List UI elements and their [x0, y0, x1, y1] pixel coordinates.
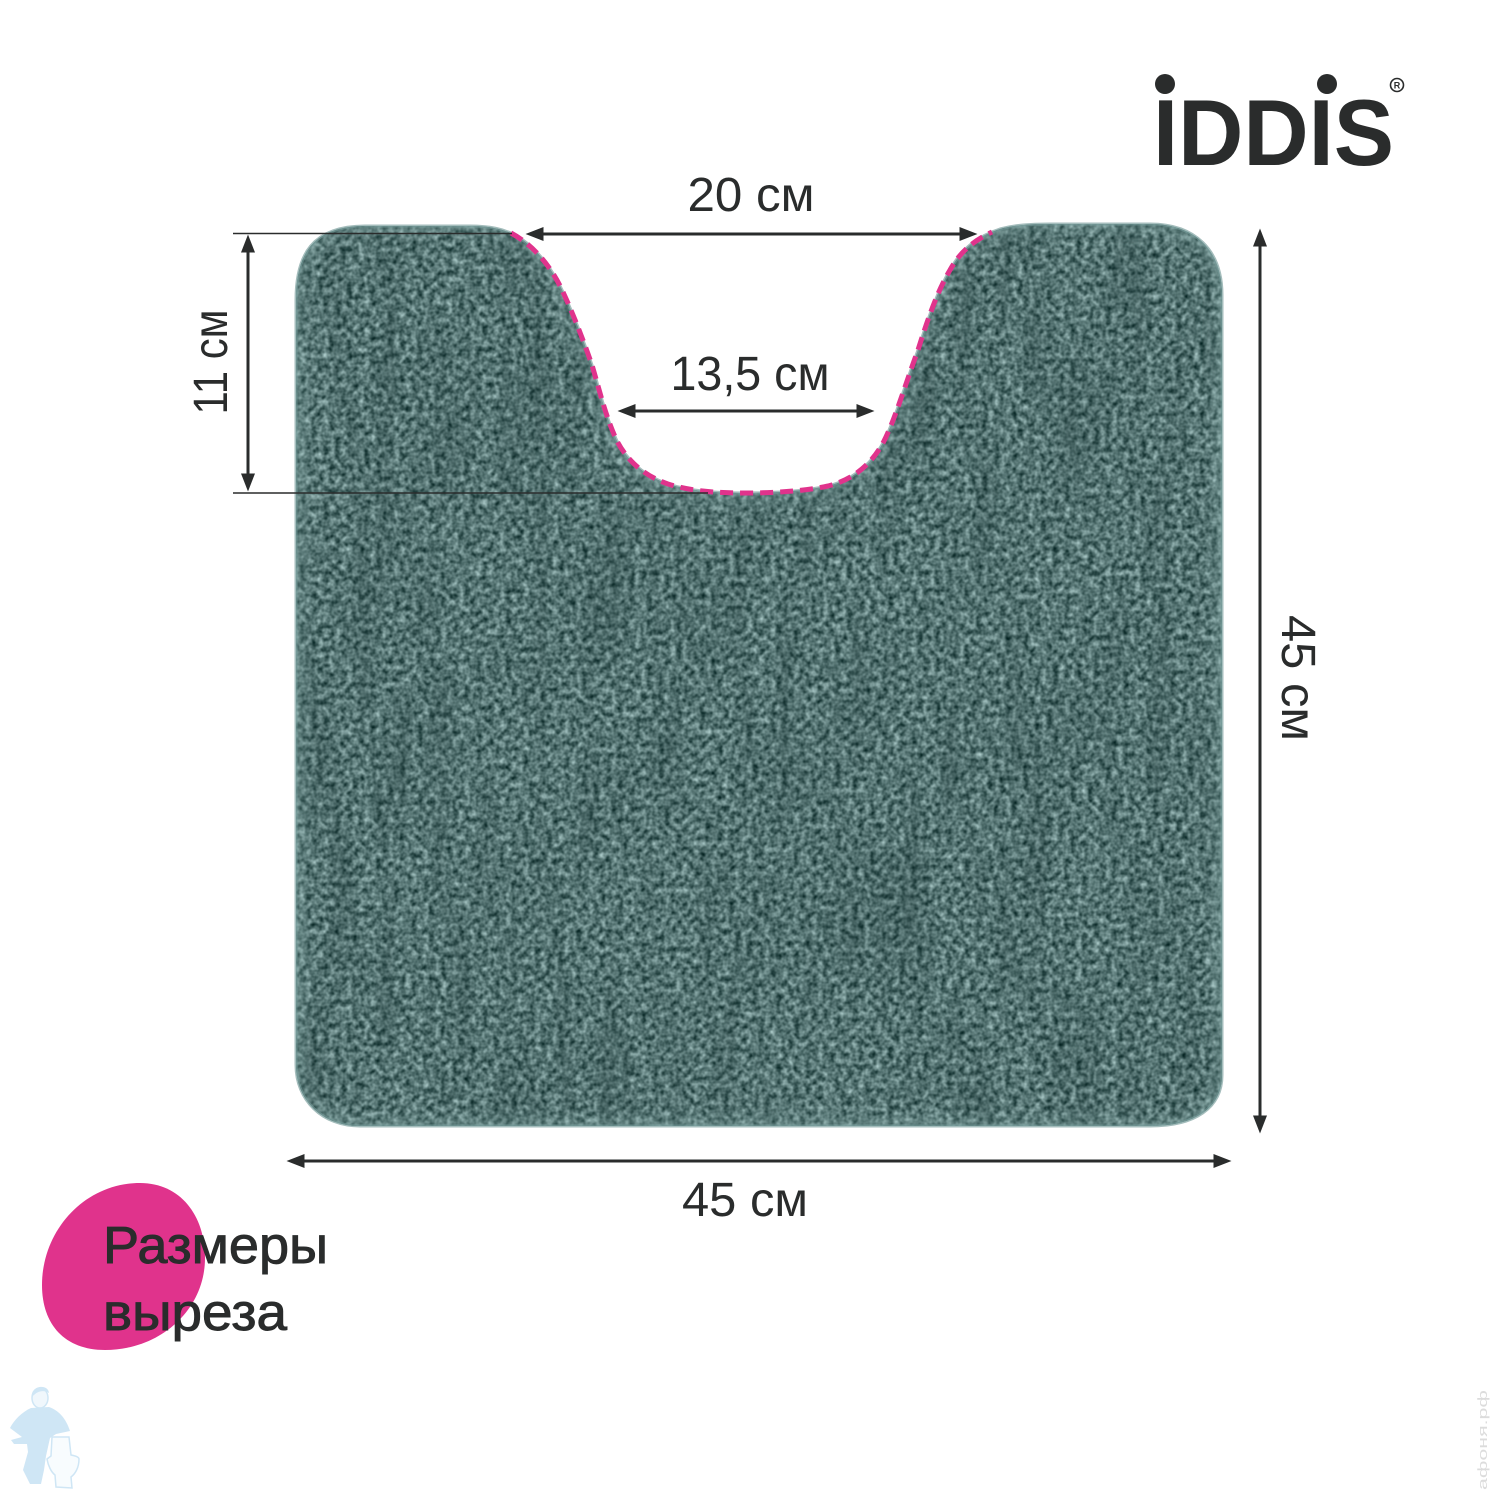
- plumber hair: [32, 1387, 49, 1397]
- bath mat photo with U-shaped cut-out: [290, 220, 1230, 1130]
- dimension: top width 20 cm: 20 см: [688, 169, 814, 222]
- legend text: cut-out dimensions: Размеры: [103, 1217, 328, 1275]
- logo: IDDIS: R: [1394, 80, 1401, 90]
- watermark text: site address: афоня.рф: [1475, 1390, 1490, 1490]
- legend text: cut-out dimensions: [103, 1217, 328, 1342]
- dimension: cut-out depth 11 cm: 11 см: [185, 310, 238, 414]
- plumber figure: [10, 1407, 70, 1484]
- toilet tank, bowl and base: [47, 1437, 79, 1488]
- pink blob legend marker: [42, 1183, 205, 1350]
- logo: IDDIS: IDDIS: [1153, 80, 1394, 185]
- watermark icon: plumber leaning on a toilet: [10, 1387, 79, 1488]
- plumber head: [32, 1388, 48, 1408]
- dashed outline of the cut-out: [511, 232, 992, 493]
- dimension: inner width 13,5 cm: 13,5 см: [670, 348, 830, 401]
- dimension: height 45 cm: 45 см: [1271, 615, 1324, 741]
- legend text: cut-out dimensions: выреза: [103, 1284, 287, 1342]
- dimension: width 45 cm: 45 см: [682, 1174, 808, 1227]
